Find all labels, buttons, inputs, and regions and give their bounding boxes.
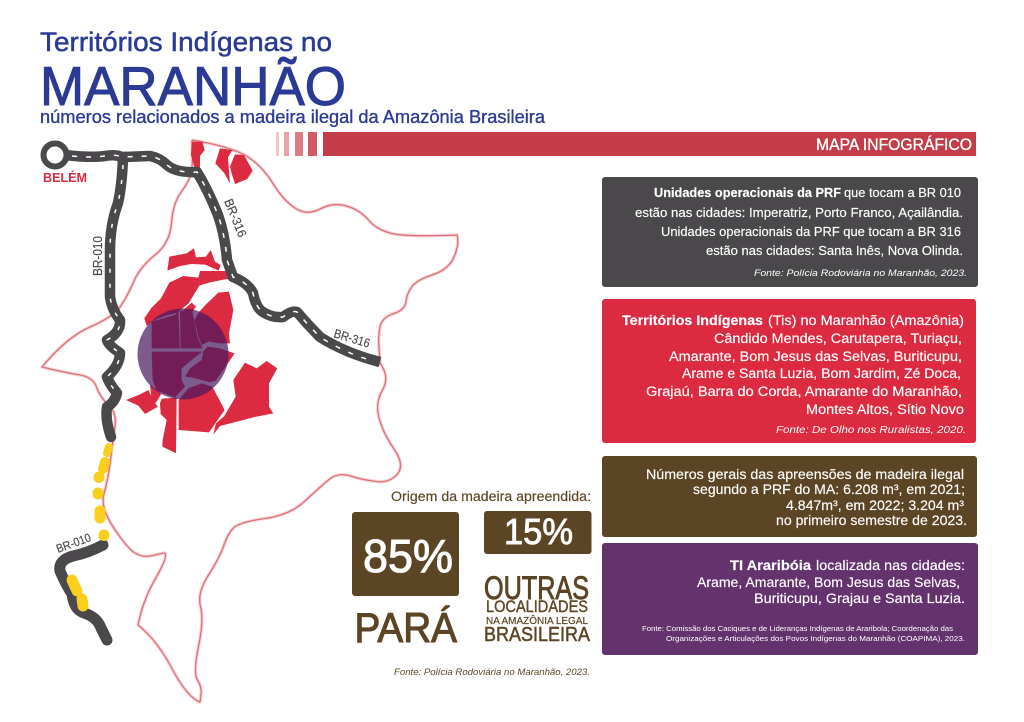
central indigenous territories (126, 248, 277, 453)
stat: 15% outras localidades: 15% (504, 511, 573, 552)
stat: 15% outras localidades: BRASILEIRA (484, 624, 591, 646)
road: BR-010 south section (60, 545, 107, 640)
panel text (697, 557, 965, 606)
road label BR-316 east: BR-316 (332, 326, 372, 351)
panel: números gerais das apreensões (602, 456, 977, 537)
panel text: segundo a PRF do MA: 6.208 m³, em 2021; (693, 481, 965, 497)
panel text: Territórios Indígenas (622, 313, 763, 328)
section: origem da madeira apreendida (352, 489, 592, 678)
panel text: TI Araribóia (730, 557, 811, 573)
panel text: Números gerais das apreensões de madeira ilegal (646, 466, 964, 482)
panel text: Unidades operacionais da PRF (654, 186, 841, 200)
panel text: Arame e Santa Luzia, Bom Jardim, Zé Doca, (682, 366, 961, 381)
source note: Fonte: Polícia Rodoviária no Maranhão, 2023. (394, 667, 590, 678)
panel text: Montes Altos, Sítio Novo (806, 402, 964, 417)
road: Belém connection and BR-316 (65, 155, 380, 362)
title line 1: Territórios Indígenas no (40, 27, 332, 57)
deforestation points along the road (72, 447, 109, 606)
northern indigenous territories (191, 142, 253, 184)
panel text: localizada nas cidades: (816, 557, 965, 573)
stat: 85% Pará (352, 512, 459, 651)
banner label: MAPA INFOGRÁFICO (816, 135, 972, 154)
source note: Fonte: Polícia Rodoviária no Maranhão, 2023. (754, 268, 967, 279)
Belém marker (44, 144, 66, 166)
source note: Fonte: Comissão dos Caciques e de Lideranças Indígenas de Araribola; Coordenação das (642, 624, 953, 633)
panel text: (Tis) no Maranhão (Amazônia) (768, 313, 964, 328)
Belém label: BELÉM (43, 170, 87, 185)
panel text: Cândido Mendes, Carutapera, Turiaçu, (714, 331, 962, 346)
state outline (42, 140, 458, 702)
source note: Fonte: De Olho nos Ruralistas, 2020. (776, 424, 966, 436)
panel text: Amarante, Bom Jesus das Selvas, Buriticupu, (669, 349, 962, 364)
panel text: estão nas cidades: Santa Inês, Nova Olinda. (706, 244, 963, 258)
panel text (646, 466, 967, 528)
panel text: Grajaú, Barra do Corda, Amarante do Maranhão, (646, 384, 962, 399)
stat: 15% outras localidades: OUTRAS (484, 570, 589, 606)
panel text: Arame, Amarante, Bom Jesus das Selvas, (697, 574, 960, 590)
map of Maranhão (42, 140, 458, 702)
panel: unidades operacionais da PRF (602, 177, 978, 287)
road label BR-010: BR-010 (91, 236, 105, 276)
panel text (622, 313, 964, 417)
stat: 85% Pará: 85% (363, 530, 453, 582)
panel: TI Araribóia (602, 543, 978, 655)
road: BR-010 north section (106, 158, 123, 437)
panel: territórios indígenas (602, 299, 976, 443)
panel text: 4.847m³, em 2022; 3.204 m³ (786, 497, 964, 513)
banner: mapa infográfico (276, 132, 976, 156)
panel text: estão nas cidades: Imperatriz, Porto Franco, Açailândia. (635, 206, 963, 220)
panel text: Unidades operacionais da PRF que tocam a BR 316 (661, 225, 961, 239)
source note: Organizações e Articulações dos Povos Indígenas do Maranhão (COAPIMA), 2023. (666, 634, 965, 643)
heading: Origem da madeira apreendida: (391, 489, 591, 504)
TI Arariboia circle (138, 308, 228, 400)
title line 2: Maranhão: MARANHÃO (40, 55, 346, 117)
panel text (635, 186, 963, 258)
road label BR-010 south: BR-010 (54, 530, 93, 556)
road label BR-316 north: BR-316 (221, 197, 249, 239)
panel text: que tocam a BR 010 (844, 186, 961, 200)
stat: 15% outras localidades: LOCALIDADES (486, 597, 588, 616)
title block (40, 27, 546, 127)
stat: 15% outras localidades: NA AMAZÔNIA LEGAL (486, 614, 588, 627)
panel text: Buriticupu, Grajau e Santa Luzia. (754, 590, 965, 606)
source note (642, 624, 965, 643)
panel text: no primeiro semestre de 2023. (776, 512, 967, 528)
stat: 15% outras localidades (484, 511, 592, 646)
subtitle: números relacionados a madeira ilegal da Amazônia Brasileira (40, 106, 546, 127)
stat: 85% Pará: PARÁ (354, 604, 457, 651)
